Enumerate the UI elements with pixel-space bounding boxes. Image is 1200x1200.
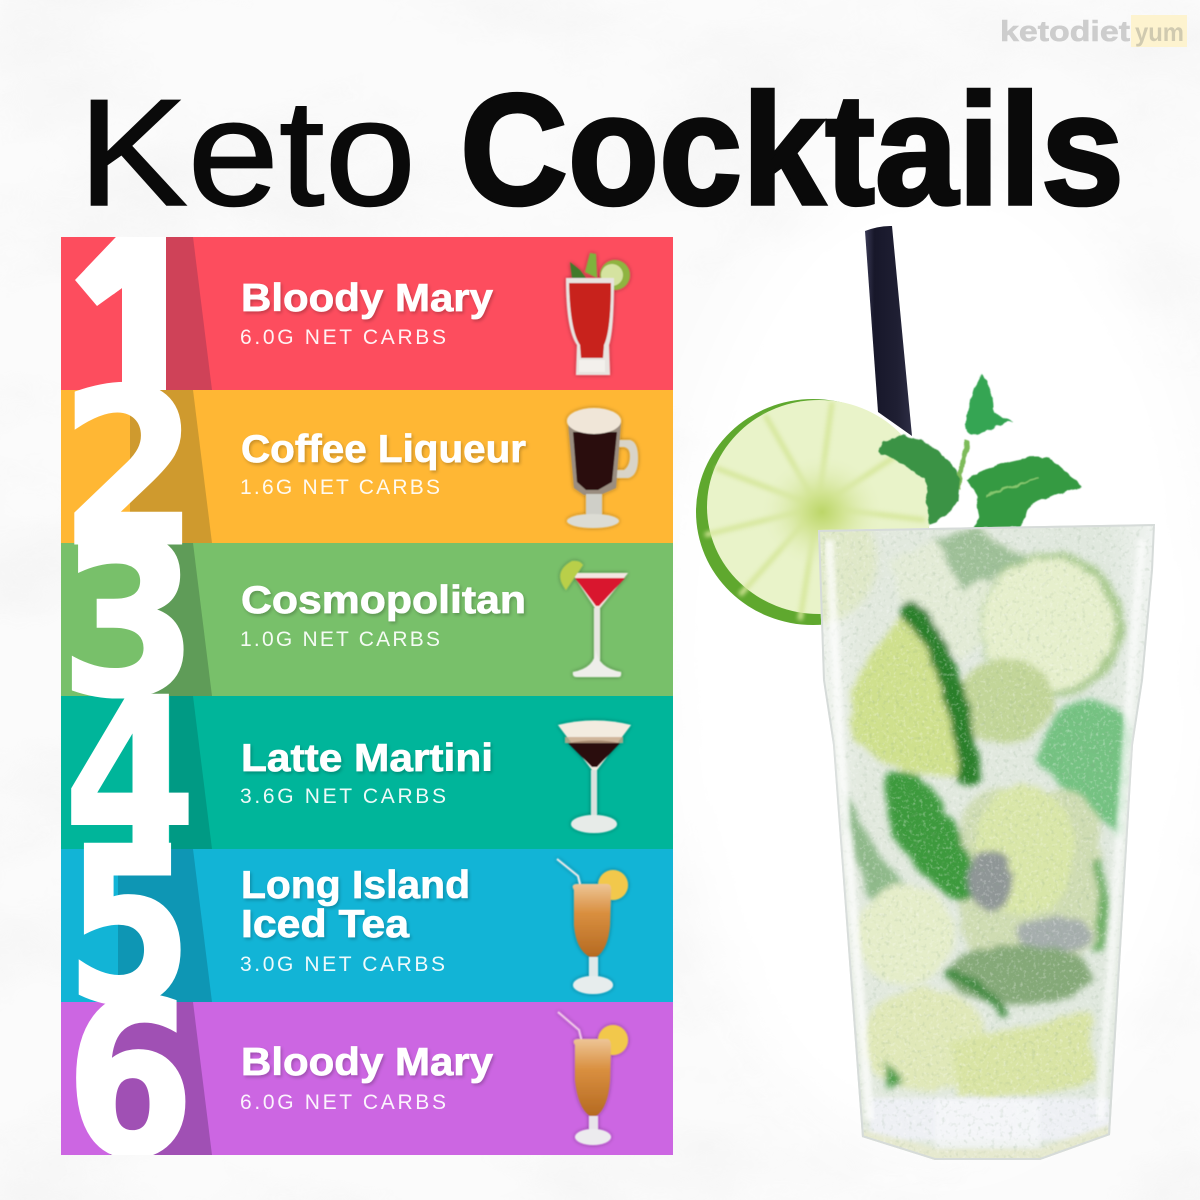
lime slice seen through glass (820, 531, 878, 626)
large rank numerals: 4 (64, 652, 196, 903)
submerged ingredients (845, 525, 1128, 1097)
left mint blur (844, 795, 907, 903)
large rank numerals: 3 (60, 494, 198, 745)
logo: ketodiet yum: ketodiet (1000, 16, 1130, 48)
lime pieces bottom (863, 988, 987, 1092)
title: Keto (78, 68, 416, 238)
row 2 text: Coffee Liqueur: Coffee Liqueur (241, 428, 526, 471)
row 5 text: Long Island Iced Tea: 3.0G NET CARBS (240, 953, 445, 976)
row 3 text: Cosmopolitan: 1.0G NET CARBS (240, 628, 440, 651)
mint leaf center (885, 772, 973, 903)
straw (865, 226, 912, 436)
row 2 text: Coffee Liqueur (240, 428, 526, 499)
ice cube (898, 548, 982, 665)
row 3 background: green (61, 543, 673, 696)
row 4 background: teal (61, 696, 673, 849)
lime slice upper right (980, 553, 1124, 697)
large rank numerals (71, 237, 189, 1155)
large rank numerals: 2 (60, 343, 198, 594)
title (78, 62, 1124, 238)
grey reflections (968, 850, 1012, 910)
center pale (960, 790, 1100, 960)
row 1 text: Bloody Mary (240, 277, 493, 349)
large rank numerals: 6 (66, 954, 194, 1200)
title: Cocktails (460, 62, 1124, 238)
bubbles (810, 520, 1160, 1170)
row 1 text: Bloody Mary: 6.0G NET CARBS (240, 326, 446, 349)
icon: iced tea glass (row 6) (558, 1012, 628, 1145)
icon: cosmopolitan glass (560, 561, 628, 677)
icon: coffee mug (567, 408, 638, 528)
icon: long island iced tea glass (557, 859, 628, 994)
lime piece center (975, 785, 1075, 915)
icon: bloody mary glass (566, 253, 630, 375)
row 3 text: Cosmopolitan (240, 579, 526, 651)
panel: ranked cocktail list (60, 190, 673, 1200)
row 5 text: Long Island Iced Tea: Iced Tea (241, 903, 409, 946)
glass body (818, 524, 1155, 1160)
row 3 text: Cosmopolitan: Cosmopolitan (241, 579, 526, 622)
glass rim and edges (818, 524, 1155, 1160)
row 2 background: yellow (61, 390, 673, 543)
row 2 text: Coffee Liqueur: 1.6G NET CARBS (240, 476, 440, 499)
row 5 text: Long Island Iced Tea: Long Island (241, 864, 470, 907)
lime slice garnish (696, 399, 931, 625)
row 1 background: red (61, 237, 673, 390)
row 4 text: Latte Martini: 3.6G NET CARBS (240, 785, 446, 808)
row 6 background: purple (61, 1002, 673, 1155)
glass base (870, 1098, 1110, 1140)
mint leaf right (1035, 701, 1128, 835)
row 6 text: Bloody Mary: 6.0G NET CARBS (240, 1091, 446, 1114)
logo: ketodiet yum (1000, 15, 1187, 48)
row 6 text: Bloody Mary (240, 1041, 493, 1114)
row 4 text: Latte Martini (240, 737, 493, 808)
large rank numerals: 1 (62, 190, 190, 441)
row 1 text: Bloody Mary: Bloody Mary (241, 277, 493, 320)
photo: mojito cocktail (696, 226, 1160, 1170)
mottled middle (957, 658, 1053, 742)
icon: latte martini glass (558, 720, 631, 833)
row 6 text: Bloody Mary: Bloody Mary (241, 1041, 493, 1084)
row 5 text: Long Island Iced Tea (240, 864, 470, 976)
logo: ketodiet yum: yum (1135, 17, 1184, 47)
large rank numerals: 5 (66, 801, 192, 1052)
mint sprig (878, 373, 1081, 528)
lime piece left (857, 885, 953, 985)
row 4 text: Latte Martini: Latte Martini (241, 737, 493, 780)
row 5 background: blue (61, 849, 673, 1002)
mint lower (948, 945, 1092, 1005)
lime wedge with rind (852, 612, 965, 777)
